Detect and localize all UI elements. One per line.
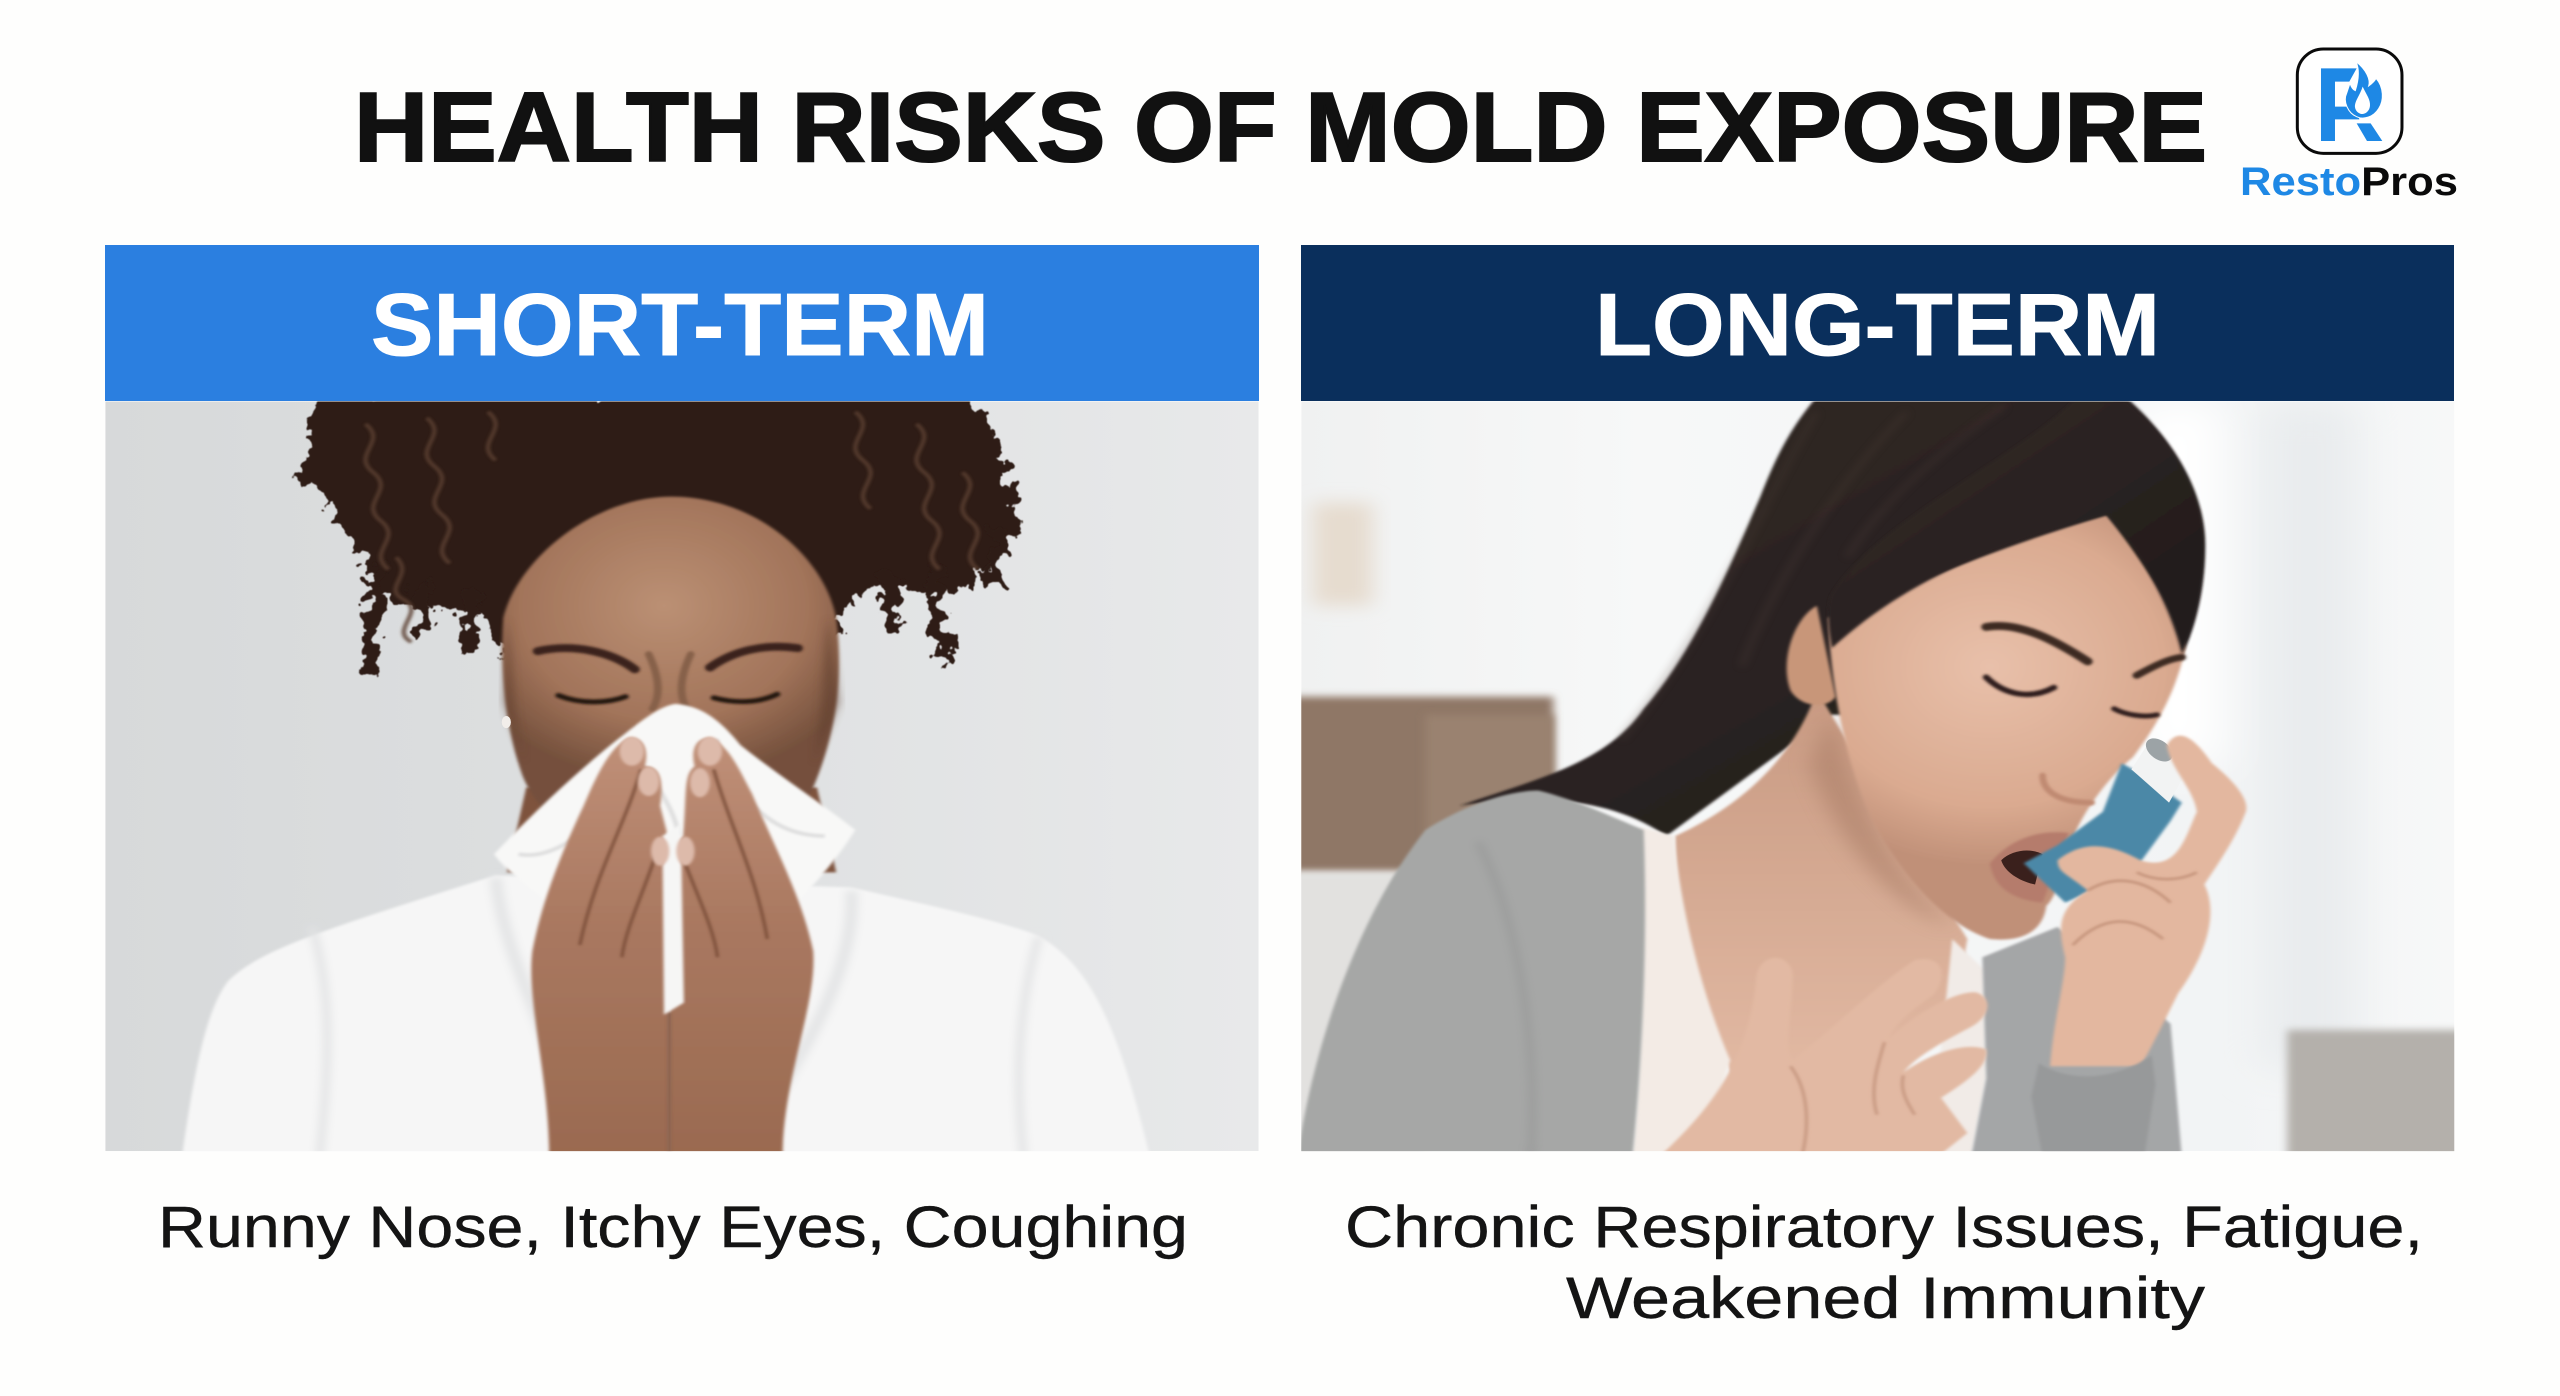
face xyxy=(500,495,842,804)
tissue xyxy=(494,704,855,903)
logo wordmark: RestoPros xyxy=(2240,160,2458,204)
long-term header bar xyxy=(1301,245,2454,401)
long-term symptoms caption: Weakened Immunity xyxy=(1566,1266,2205,1331)
chest hand xyxy=(1659,958,1987,1157)
long-term symptoms caption: Chronic Respiratory Issues, Fatigue, xyxy=(1345,1195,2423,1260)
hands xyxy=(531,738,669,1157)
photo: woman using an inhaler xyxy=(1290,397,2468,1163)
back hair xyxy=(1459,397,2204,836)
title: HEALTH RISKS OF MOLD EXPOSURE xyxy=(354,72,2207,182)
shirt xyxy=(182,875,1150,1157)
photo: woman sneezing into a tissue xyxy=(105,394,1259,1157)
inhaler xyxy=(2024,763,2182,903)
logo icon: R with flame and water drop xyxy=(2297,49,2402,153)
finger gaps xyxy=(580,769,767,1157)
long-term symptoms caption xyxy=(1345,1195,2423,1331)
mouth xyxy=(1990,832,2069,903)
fingernails xyxy=(620,737,722,866)
inhaler hand xyxy=(2050,736,2246,1066)
long-term header bar: LONG-TERM xyxy=(1595,275,2160,374)
cardigan xyxy=(1298,791,1645,1157)
brows, eyes, nose xyxy=(1986,626,2182,803)
brows and closed eyes xyxy=(538,647,798,709)
panel: short-term xyxy=(105,245,1259,1260)
white top xyxy=(1632,827,1730,1157)
short-term header bar: SHORT-TERM xyxy=(371,275,989,374)
face xyxy=(1828,515,2186,940)
hair mass xyxy=(297,394,1021,654)
neck xyxy=(507,788,836,872)
short-term header bar xyxy=(105,245,1259,401)
sleeve cuff xyxy=(2031,1055,2155,1157)
hair curls xyxy=(366,533,1000,672)
logo: RestoPros xyxy=(2240,49,2458,204)
tissue strip between hands xyxy=(662,824,684,1015)
neck and chest xyxy=(1675,691,1967,1078)
earring xyxy=(502,716,511,728)
ear xyxy=(1787,606,1836,705)
panel: long-term xyxy=(1290,245,2468,1331)
short-term symptoms caption: Runny Nose, Itchy Eyes, Coughing xyxy=(158,1195,1188,1260)
side hair over forehead xyxy=(1828,401,2204,654)
